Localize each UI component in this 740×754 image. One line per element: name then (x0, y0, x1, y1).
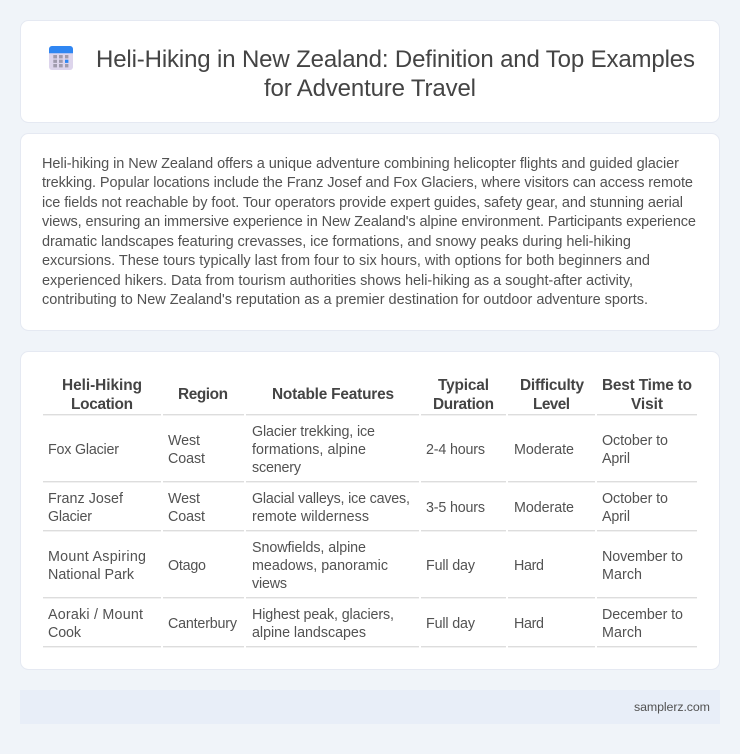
icon: calendar (49, 46, 73, 70)
table row: Mount Aspiring National Park: Mount Aspiring (48, 549, 146, 565)
table header row: Location (71, 396, 133, 413)
table row: Aoraki / Mount Cook: Full day (426, 616, 476, 632)
table row: Aoraki / Mount Cook: Canterbury (168, 616, 238, 632)
table row: Aoraki / Mount Cook: Hard (514, 616, 544, 632)
text block: description paragraph: views, ensuring an immersive experience in New Zealand's alpine environment. Participants experience (42, 214, 696, 230)
text block: description paragraph: excursions. These tours typically last from four to six hours, with options for both beginners and (42, 253, 650, 269)
table row: Franz Josef Glacier: Glacier (48, 509, 92, 525)
table row: Fox Glacier: Glacier trekking, ice (252, 424, 375, 440)
table header row: Notable Features (272, 386, 394, 403)
table row: Fox Glacier: Moderate (514, 442, 574, 458)
table header row: Difficulty (520, 377, 584, 394)
table row: Aoraki / Mount Cook: Cook (48, 625, 82, 641)
table row: Mount Aspiring National Park: Otago (168, 558, 206, 574)
table row: Fox Glacier: West (168, 433, 200, 449)
table header row: Region (178, 386, 228, 403)
table row: Fox Glacier: April (602, 451, 630, 467)
text block: description paragraph (42, 156, 696, 308)
table row: Mount Aspiring National Park: meadows, panoramic (252, 558, 388, 574)
table row: Aoraki / Mount Cook: December to (602, 607, 683, 623)
table header row: Visit (631, 396, 663, 413)
table row: Franz Josef Glacier: October to (602, 491, 668, 507)
table row: Mount Aspiring National Park: March (602, 567, 642, 583)
text block: description paragraph: Heli-hiking in New Zealand offers a unique adventure combining helicopter flights and guided glacier (42, 156, 679, 172)
table row: Mount Aspiring National Park: Hard (514, 558, 544, 574)
table header row: Heli-Hiking (62, 377, 142, 394)
text block: description paragraph: ice fields not reachable by foot. Tour operators provide expert guides, safety gear, and stunning aerial (42, 195, 683, 211)
table row: Aoraki / Mount Cook: Highest peak, glaciers, (252, 607, 394, 623)
text block: description paragraph: contributing to New Zealand's reputation as a premier destination for outdoor adventure sports. (42, 292, 648, 308)
panel: description (20, 134, 720, 330)
table row: Franz Josef Glacier: Moderate (514, 500, 574, 516)
table row: Fox Glacier: Fox Glacier (48, 442, 119, 458)
table header row: Duration (433, 396, 494, 413)
table row: Franz Josef Glacier: West (168, 491, 200, 507)
panel: table (20, 352, 720, 670)
text block: description paragraph: experienced hikers. Data from tourism authorities shows heli-hiking as a sought-after activity, (42, 273, 633, 289)
table row: Fox Glacier: Coast (168, 451, 205, 467)
table row: Mount Aspiring National Park: Snowfields, alpine (252, 540, 366, 556)
table row: Franz Josef Glacier: 3-5 hours (426, 500, 485, 516)
table header row: Best Time to (602, 377, 692, 394)
text block: description paragraph: trekking. Popular locations include the Franz Josef and Fox Glaciers, where visitors can access remote (42, 175, 693, 191)
title: Heli-Hiking in New Zealand: Definition and Top Examples (96, 46, 695, 73)
table row: Mount Aspiring National Park: Full day (426, 558, 476, 574)
table row: Franz Josef Glacier: Coast (168, 509, 205, 525)
table row: Franz Josef Glacier: remote wilderness (252, 509, 369, 525)
table header row (62, 377, 692, 413)
footer source text: samplerz.com (634, 700, 710, 714)
text block: description paragraph: dramatic landscapes featuring crevasses, ice formations, and snowy peaks during heli-hiking (42, 234, 631, 250)
table row: Fox Glacier: 2-4 hours (426, 442, 485, 458)
title (96, 46, 695, 102)
table row: Fox Glacier: formations, alpine (252, 442, 366, 458)
table header row: Typical (438, 377, 489, 394)
panel: header (20, 20, 720, 122)
table header row: Level (533, 396, 570, 413)
table row: Mount Aspiring National Park: National Park (48, 567, 135, 583)
table row: Aoraki / Mount Cook (48, 607, 683, 641)
table row: Franz Josef Glacier: Franz Josef (48, 491, 123, 507)
table row: Aoraki / Mount Cook: Aoraki / Mount (48, 607, 143, 623)
table row: Franz Josef Glacier: April (602, 509, 630, 525)
table row: Fox Glacier: scenery (252, 460, 302, 476)
table row: Franz Josef Glacier: Glacial valleys, ice caves, (252, 491, 410, 507)
table row: Mount Aspiring National Park: views (252, 576, 287, 592)
title: for Adventure Travel (264, 75, 476, 102)
table row: Aoraki / Mount Cook: alpine landscapes (252, 625, 366, 641)
table row: Aoraki / Mount Cook: March (602, 625, 642, 641)
table row: Mount Aspiring National Park: November to (602, 549, 683, 565)
table row: Mount Aspiring National Park (48, 540, 683, 592)
footer bar (20, 690, 720, 724)
table row: Franz Josef Glacier (48, 491, 668, 525)
table row: Fox Glacier (48, 424, 668, 476)
table row: Fox Glacier: October to (602, 433, 668, 449)
